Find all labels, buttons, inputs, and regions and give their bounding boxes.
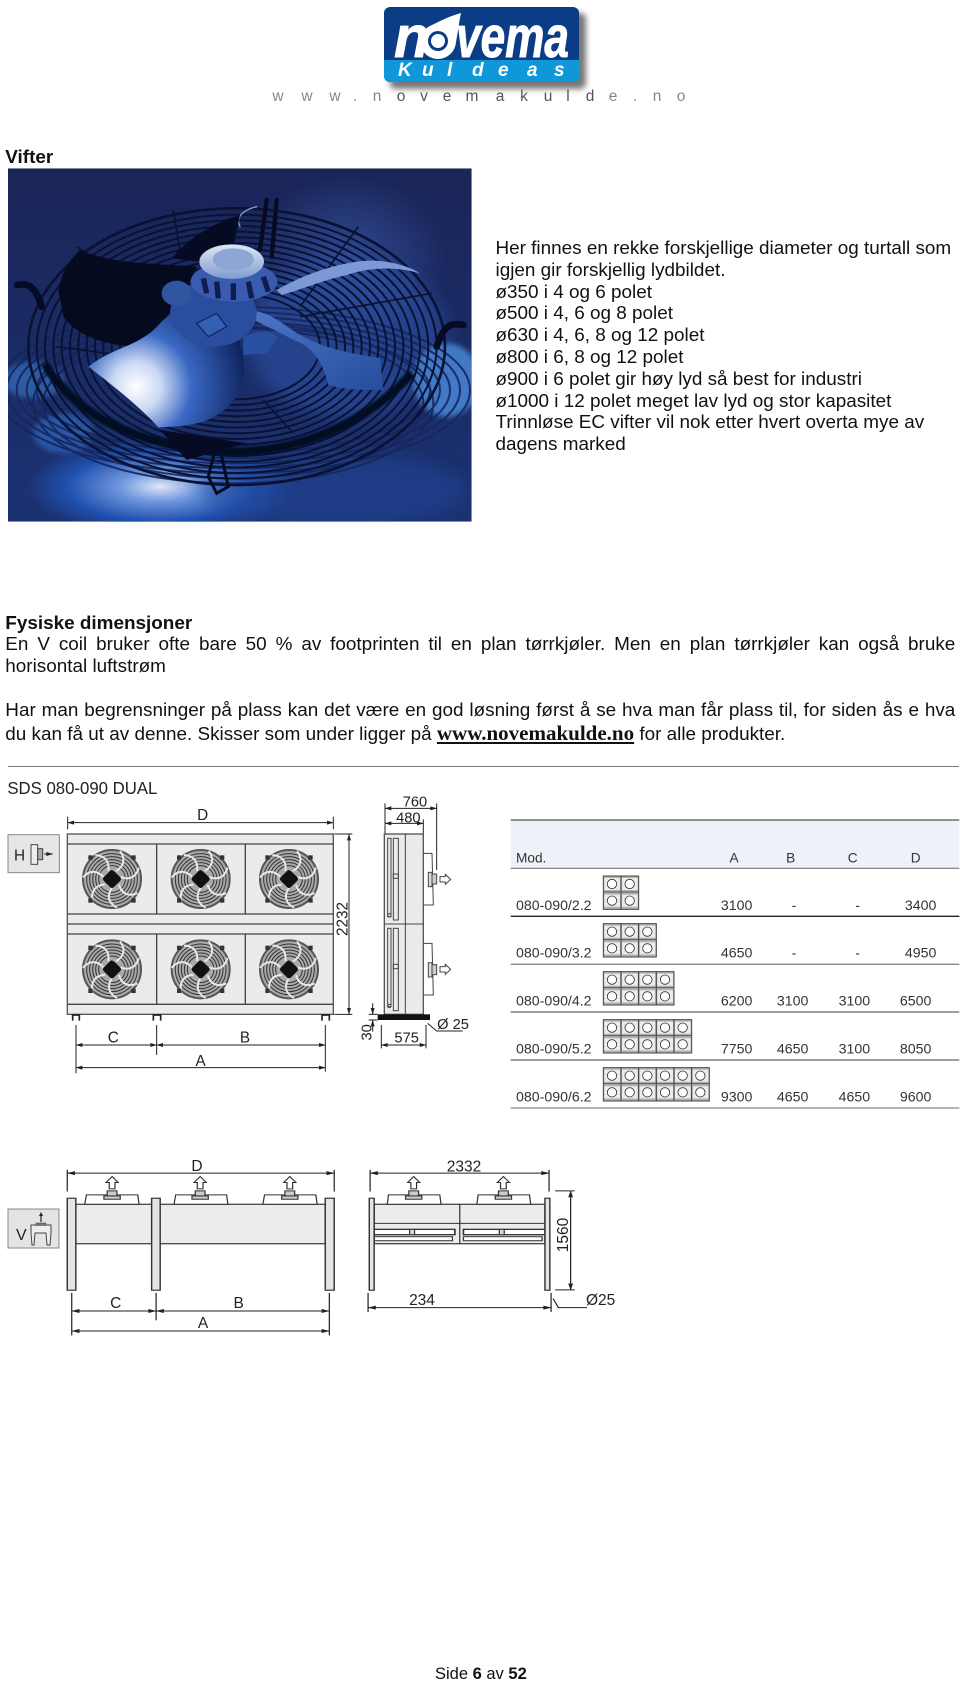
side dimensions 760, 480, 30, 575, Ø25: 30	[359, 1024, 375, 1040]
dimensions D, C, B, A, 2232	[68, 807, 352, 1073]
thin upper-right blade	[277, 261, 420, 295]
V orientation icon: V	[16, 1227, 27, 1244]
text block: fan sizes: ø500 i 4, 6 og 8 polet	[496, 303, 673, 324]
side dimensions 760, 480, 30, 575, Ø25: 760	[403, 795, 427, 811]
V side elevation	[368, 1170, 587, 1312]
text block: limited space	[5, 700, 956, 745]
dimensions D, C, B, A, 2232: D	[197, 807, 208, 824]
vertical view drawing	[8, 1158, 615, 1335]
dimension table	[511, 820, 959, 1108]
table header: D	[911, 850, 921, 865]
row 2.2: -	[855, 898, 860, 914]
text block: physical dimensions: En V coil bruker ofte bare 50 % av footprinten til en plan tørrkjøler. Men en plan tørrkjøler kan også bruke	[5, 634, 955, 655]
row 6.2: 4650	[777, 1089, 809, 1105]
V front dimension labels: C	[110, 1295, 121, 1312]
table header: A	[729, 850, 739, 865]
side dimensions 760, 480, 30, 575, Ø25: 480	[396, 810, 421, 826]
table header: C	[848, 850, 858, 865]
row 5.2: 7750	[721, 1041, 753, 1057]
motor and hub	[170, 280, 257, 347]
text block: fan sizes: ø800 i 6, 8 og 12 polet	[496, 347, 684, 368]
fan photograph	[0, 168, 480, 537]
logo sub-name: Kulde as	[398, 60, 565, 81]
H orientation icon	[8, 835, 59, 873]
text block: physical dimensions	[5, 613, 955, 677]
row 6.2: 080-090/6.2	[516, 1089, 592, 1105]
row 3.2: 4650	[721, 946, 753, 962]
row 4.2: 6200	[721, 994, 753, 1010]
heading: Vifter: Vifter	[5, 147, 53, 168]
V orientation icon	[8, 1209, 59, 1248]
row 5.2: 3100	[839, 1041, 870, 1057]
drawing title: SDS 080-090 DUAL	[7, 778, 158, 798]
dimensions D, C, B, A, 2232: 2232	[334, 902, 351, 936]
dark blades	[58, 250, 197, 347]
V front dimension labels: D	[191, 1158, 203, 1175]
text block: fan sizes: ø630 i 4, 6, 8 og 12 polet	[496, 325, 704, 346]
website line: www.n ovemakuld e.no	[271, 88, 685, 105]
row 6.2: 4650	[839, 1089, 870, 1105]
logo fan-shaped o	[420, 13, 461, 59]
row 4.2	[516, 972, 932, 1010]
row 3.2: -	[855, 946, 860, 962]
V side dimension labels	[409, 1158, 615, 1309]
right blade	[243, 311, 383, 390]
row 4.2: 3100	[839, 994, 870, 1010]
lit blade	[88, 314, 244, 428]
H orientation icon: H	[14, 848, 25, 865]
logo wordmark: vema	[456, 5, 569, 70]
divider above drawings	[8, 766, 959, 767]
dimensions D, C, B, A, 2232: B	[240, 1029, 250, 1046]
logo wordmark	[394, 5, 569, 70]
row 3.2	[516, 924, 937, 962]
side dimensions 760, 480, 30, 575, Ø25: Ø 25	[437, 1017, 469, 1033]
row 4.2: 3100	[777, 994, 809, 1010]
row 4.2: 6500	[900, 994, 932, 1010]
V side dimension labels: 2332	[447, 1158, 481, 1176]
row 5.2: 080-090/5.2	[516, 1041, 592, 1057]
logo wordmark: o	[423, 5, 453, 70]
text block: fan sizes: ø900 i 6 polet gir høy lyd så best for industri	[496, 369, 862, 390]
front elevation panel	[67, 834, 333, 1021]
V front dimension labels: A	[198, 1315, 209, 1332]
V side dimension labels: 1560	[555, 1217, 572, 1252]
logo light blue band	[384, 60, 579, 82]
side dimensions 760, 480, 30, 575, Ø25	[359, 795, 469, 1048]
logo: Novema Kulde AS	[271, 5, 685, 105]
row 5.2: 8050	[900, 1041, 932, 1057]
dimensions D, C, B, A, 2232: C	[108, 1029, 119, 1046]
row 5.2	[516, 1020, 932, 1057]
text block: limited space: du kan få ut av denne. Skisser som under ligger på www.novemakulde.no for alle produkter.	[5, 721, 785, 745]
table header: B	[786, 850, 795, 865]
side dimensions 760, 480, 30, 575, Ø25: 575	[394, 1030, 419, 1046]
text block: physical dimensions: horisontal luftstrøm	[5, 656, 166, 677]
text block: fan sizes: dagens marked	[496, 434, 626, 455]
text block: fan sizes: Trinnløse EC vifter vil nok etter hvert overta mye av	[496, 412, 924, 433]
row 6.2	[516, 1068, 932, 1105]
V front elevation	[67, 1170, 334, 1335]
text block: fan sizes: ø350 i 4 og 6 polet	[496, 282, 652, 303]
text block: fan sizes: ø1000 i 12 polet meget lav lyd og stor kapasitet	[496, 391, 891, 412]
side elevation	[378, 834, 451, 1020]
row 6.2: 9600	[900, 1089, 932, 1105]
horizontal view drawing: SDS 080-090 DUAL	[7, 778, 469, 1073]
table header	[511, 820, 959, 868]
row 3.2: -	[792, 946, 797, 962]
dimensions D, C, B, A, 2232: A	[196, 1053, 207, 1070]
text block: physical dimensions: Fysiske dimensjoner	[5, 613, 192, 634]
text block: fan sizes: Her finnes en rekke forskjellige diameter og turtall som	[496, 238, 951, 259]
row 5.2: 4650	[777, 1041, 809, 1057]
row 2.2: 3400	[905, 898, 937, 914]
logo dark blue plate	[384, 7, 579, 82]
row 4.2: 080-090/4.2	[516, 994, 592, 1010]
logo wordmark: n	[394, 5, 429, 70]
row 3.2: 4950	[905, 946, 937, 962]
mounting brackets	[17, 200, 463, 493]
row 6.2: 9300	[721, 1089, 753, 1105]
text block: fan sizes: igjen gir forskjellig lydbildet.	[496, 260, 725, 281]
row 3.2: 080-090/3.2	[516, 946, 592, 962]
V side dimension labels: 234	[409, 1292, 435, 1309]
V front dimension labels: B	[234, 1295, 244, 1312]
table header: Mod.	[516, 850, 546, 865]
row 2.2: 3100	[721, 898, 753, 914]
row 2.2: 080-090/2.2	[516, 898, 592, 914]
text block: limited space: Har man begrensninger på plass kan det være en god løsning først å se hva man får plass til, for siden ås e hva	[5, 700, 955, 721]
V front dimension labels	[110, 1158, 244, 1332]
V side dimension labels: Ø25	[586, 1292, 615, 1309]
text block: fan sizes	[496, 238, 951, 455]
row 2.2: -	[792, 898, 797, 914]
row 2.2	[516, 876, 937, 914]
fan guard rings	[28, 208, 445, 485]
